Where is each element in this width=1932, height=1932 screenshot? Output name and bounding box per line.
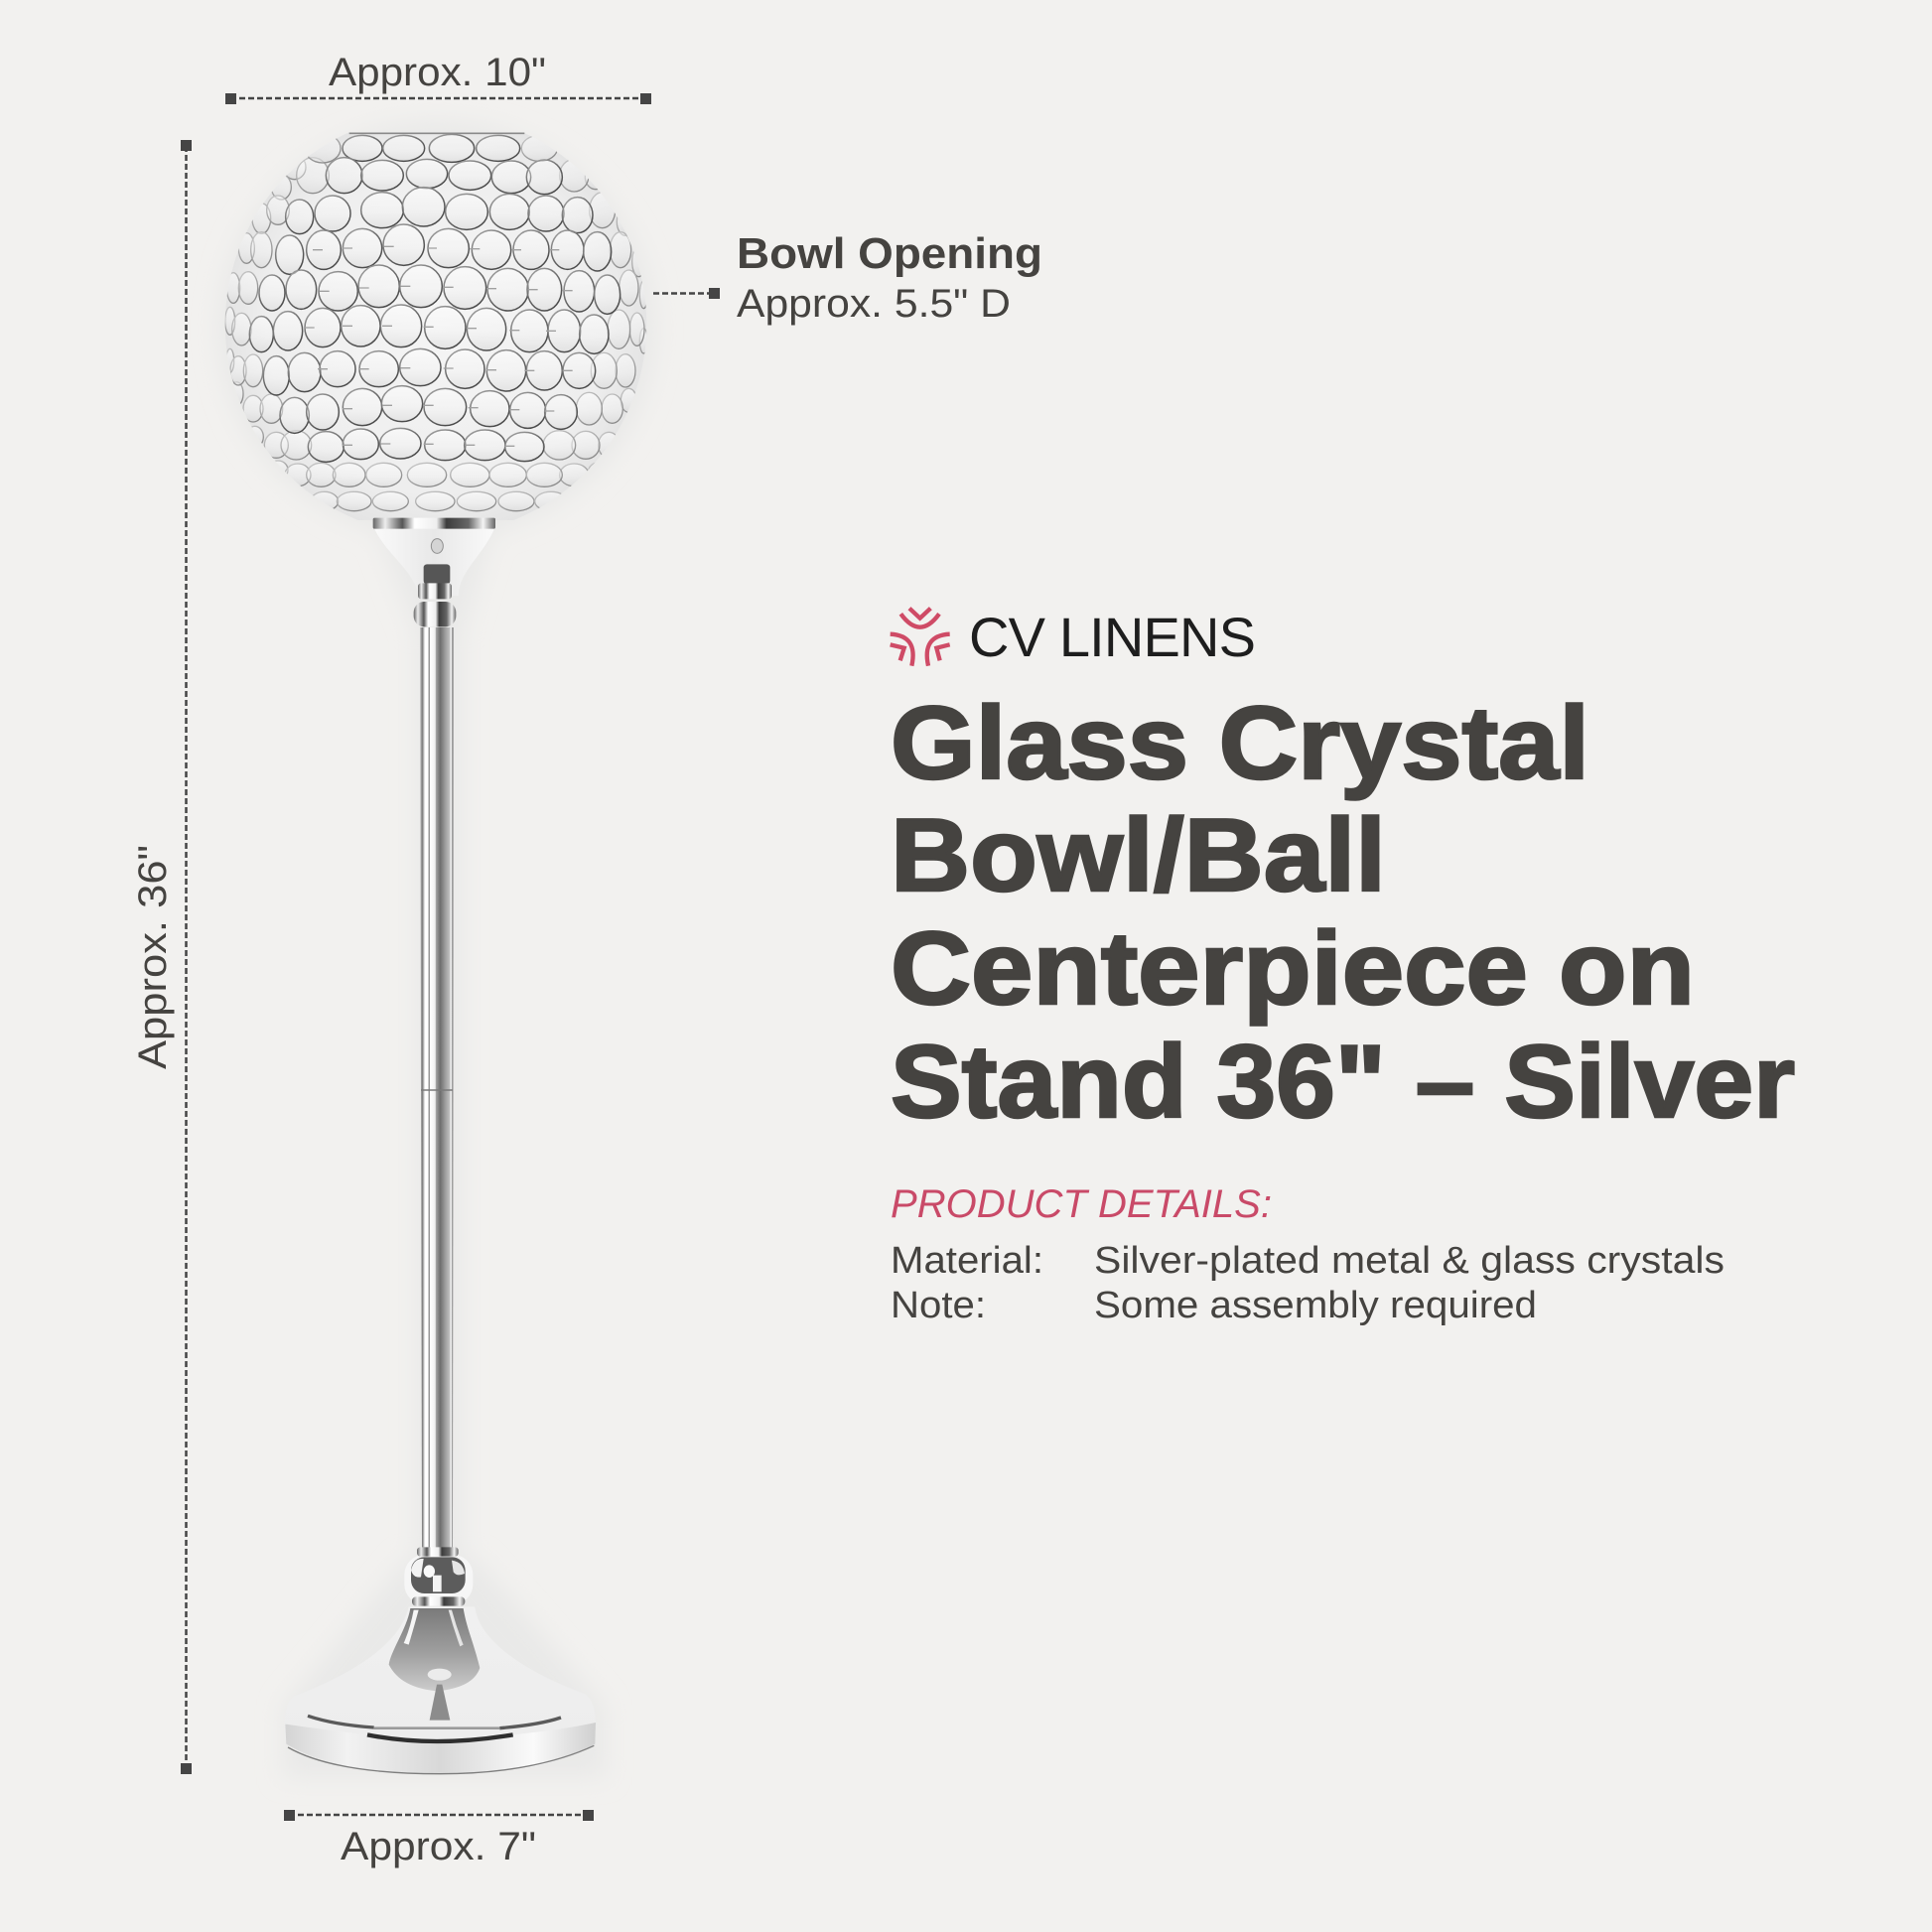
callout: bowl opening [653, 229, 1042, 326]
pole [420, 627, 454, 1555]
callout: bowl opening: Bowl Opening [737, 229, 1042, 278]
title: Stand 36" – Silver [891, 1025, 1795, 1140]
icon: CV Linens mark [891, 609, 950, 666]
cup below ball [373, 518, 495, 626]
details rows: Material: [891, 1240, 1043, 1282]
product details [891, 1182, 1725, 1326]
details rows: Silver-plated metal & glass crystals [1094, 1240, 1725, 1282]
callout: bowl opening: Approx. 5.5" D [737, 282, 1011, 326]
ring connector ticks [305, 246, 573, 446]
dimension: top width: Approx. 10" [329, 51, 546, 94]
dimension: height [131, 140, 192, 1774]
title: Bowl/Ball [891, 798, 1386, 913]
details rows: Some assembly required [1094, 1285, 1537, 1326]
title [891, 686, 1795, 1140]
details rows: Note: [891, 1285, 986, 1326]
dimension: base width [284, 1810, 594, 1868]
dimension: base width: Approx. 7" [341, 1825, 536, 1868]
base [285, 1606, 596, 1774]
brand logo: CV LINENS [969, 606, 1256, 668]
dimension: top width [225, 51, 651, 104]
details heading: PRODUCT DETAILS: [891, 1182, 1272, 1226]
title: Glass Crystal [891, 686, 1589, 801]
details rows [891, 1240, 1725, 1326]
product: crystal bowl on stand [225, 113, 647, 1774]
product soft shadow [218, 121, 655, 1777]
dimension: height: Approx. 36" [131, 845, 175, 1069]
crystal ball [225, 113, 647, 535]
lower chrome ball [404, 1547, 473, 1606]
title: Centerpiece on [891, 911, 1695, 1027]
